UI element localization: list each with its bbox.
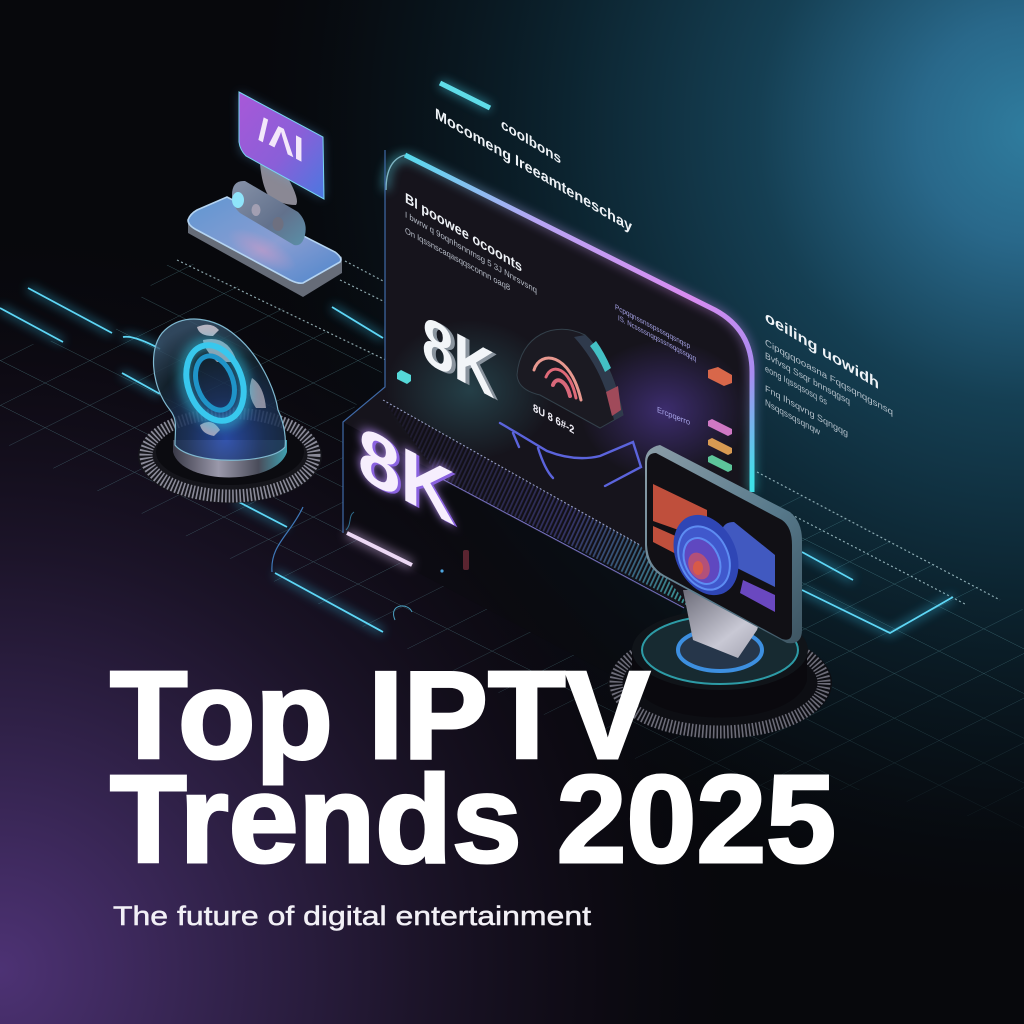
hatched lower band	[380, 395, 695, 610]
ticked base ring	[146, 414, 314, 496]
icon: glass dome with cyan ring	[138, 319, 322, 503]
red blocks	[653, 484, 707, 556]
base slab	[188, 197, 342, 297]
isometric floor grid	[0, 264, 1024, 828]
right body text	[765, 338, 893, 439]
panel side text	[615, 302, 696, 427]
extruded 8K white: 8K	[426, 302, 499, 415]
blue cable	[500, 423, 641, 486]
panel haze	[385, 320, 750, 480]
plate reflection	[222, 220, 302, 280]
right text block	[765, 308, 893, 439]
panel glowing edge	[386, 155, 752, 492]
tablet screen	[647, 453, 792, 640]
silver stem	[683, 590, 770, 658]
dark puck	[632, 610, 808, 718]
purple 8K sign: 8K	[358, 409, 455, 543]
half-round dial	[517, 329, 623, 428]
ticked base ring	[616, 634, 824, 732]
dark platform	[156, 419, 304, 485]
panel side text: Pcpqqnssnsspsssqqsnqsp	[615, 302, 690, 351]
blue and purple blocks	[722, 522, 775, 612]
small teal chip	[397, 370, 411, 384]
glass body	[154, 319, 285, 460]
base disk	[138, 409, 322, 503]
glass highlights	[197, 325, 266, 436]
panel side text: Ercpqerro	[657, 404, 690, 427]
signal arcs	[534, 358, 581, 400]
label: coolbons: coolbons	[501, 116, 561, 168]
dial caption: 8U 8 6#-2	[533, 402, 574, 437]
purple 8K sign: 8K	[361, 411, 458, 545]
right body text: eong Iqssqsosq 6s	[765, 364, 827, 408]
sign label: /ΛI	[258, 108, 304, 170]
control dots	[232, 192, 284, 231]
right body text: Cipqgqooasna Fqqsqnqgsnsq	[765, 338, 893, 418]
icon: tablet on round stand	[608, 445, 832, 738]
dotted guide lines	[177, 260, 1000, 604]
small floor beacons	[272, 507, 469, 620]
panel body text: On Iqssnscaqasqqsconnn oaq8	[405, 226, 510, 293]
purple 8K sign: 8K	[358, 409, 455, 543]
panel heading: Bl poowee ocoonts	[405, 190, 522, 276]
sign glow	[239, 92, 324, 199]
colour bars	[708, 367, 732, 472]
metal collar	[173, 440, 287, 478]
title	[110, 647, 836, 889]
glowing floor bar	[347, 533, 412, 565]
right body text: Fnq Ihsqvng Sqngqg	[765, 384, 848, 439]
icon: AI sign on base	[188, 92, 342, 297]
top cyan accent bar	[440, 83, 490, 108]
panel surface	[343, 157, 752, 610]
panel body text: I bwrw q 9oqnhsnnmsg 5 3J Nnrsvsnq	[405, 210, 537, 295]
main holographic panel	[342, 148, 762, 608]
sign stem	[260, 164, 297, 205]
label: upcoming technology: Mocomeng Ireeamteneschay	[435, 105, 632, 236]
right body text: Bvfvsq Ssqr bnnsqgsq	[765, 351, 850, 408]
right body text: Nsqqssqsqnqw	[765, 398, 820, 438]
dark floor section below the panel	[343, 422, 684, 690]
title: Trends 2025	[110, 751, 836, 889]
sign card	[239, 92, 324, 199]
subtitle: The future of digital entertainment	[113, 901, 592, 931]
tablet frame	[645, 445, 802, 643]
panel side text: IS. Ncssssnqqsssnsqqssqqq	[618, 313, 696, 363]
neon floor lines	[0, 288, 953, 633]
camera lens	[661, 504, 751, 606]
panel front frame	[343, 150, 385, 533]
control bar	[232, 181, 306, 245]
base disk	[608, 628, 832, 738]
cyan ring	[174, 335, 256, 431]
extruded 8K white: 8K	[422, 300, 495, 413]
title: Top IPTV	[110, 647, 650, 785]
right heading: oeiling uowidh	[765, 308, 879, 393]
